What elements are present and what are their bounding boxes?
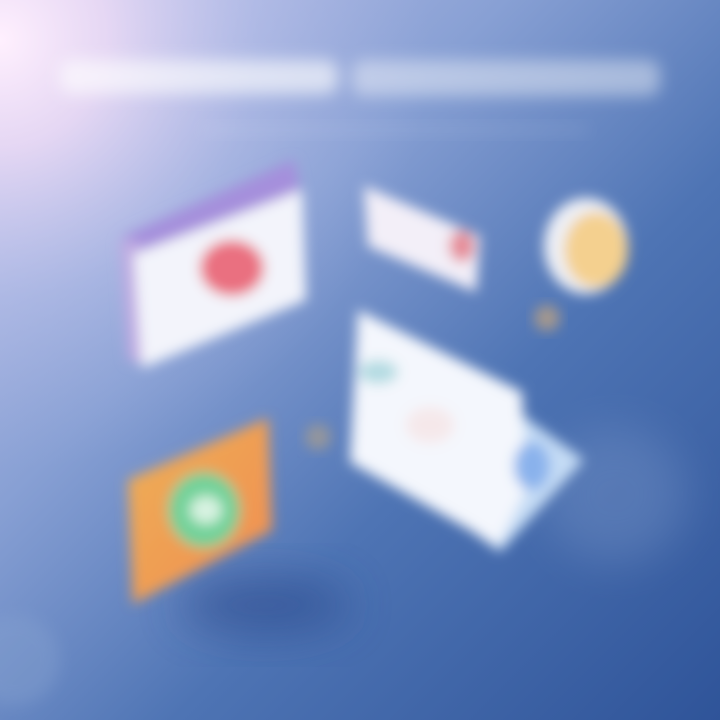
green icon [168, 472, 240, 548]
shadow under orange tile [180, 577, 350, 633]
card accent [449, 230, 475, 262]
icon: small dot lower [305, 424, 331, 450]
screen teal accent [358, 360, 398, 384]
panel: laptop [350, 310, 584, 552]
panel: small card [364, 186, 480, 292]
white icon center [190, 496, 222, 524]
panel: orange app tile [128, 418, 272, 604]
screen pink accent [406, 407, 454, 443]
background circle: bottom right [543, 427, 687, 563]
background circle: bottom left [0, 615, 60, 705]
blue accent [514, 442, 550, 490]
window side edge [120, 240, 148, 365]
title band [60, 60, 660, 96]
window body [134, 190, 306, 368]
icon: small dot upper [534, 305, 560, 331]
window header bar [124, 160, 300, 262]
laptop screen [350, 310, 526, 546]
subtitle band [200, 125, 590, 135]
panel: browser window [120, 160, 306, 368]
red blob icon [200, 240, 264, 296]
icon: coin [544, 198, 628, 294]
laptop keyboard base [470, 415, 584, 552]
